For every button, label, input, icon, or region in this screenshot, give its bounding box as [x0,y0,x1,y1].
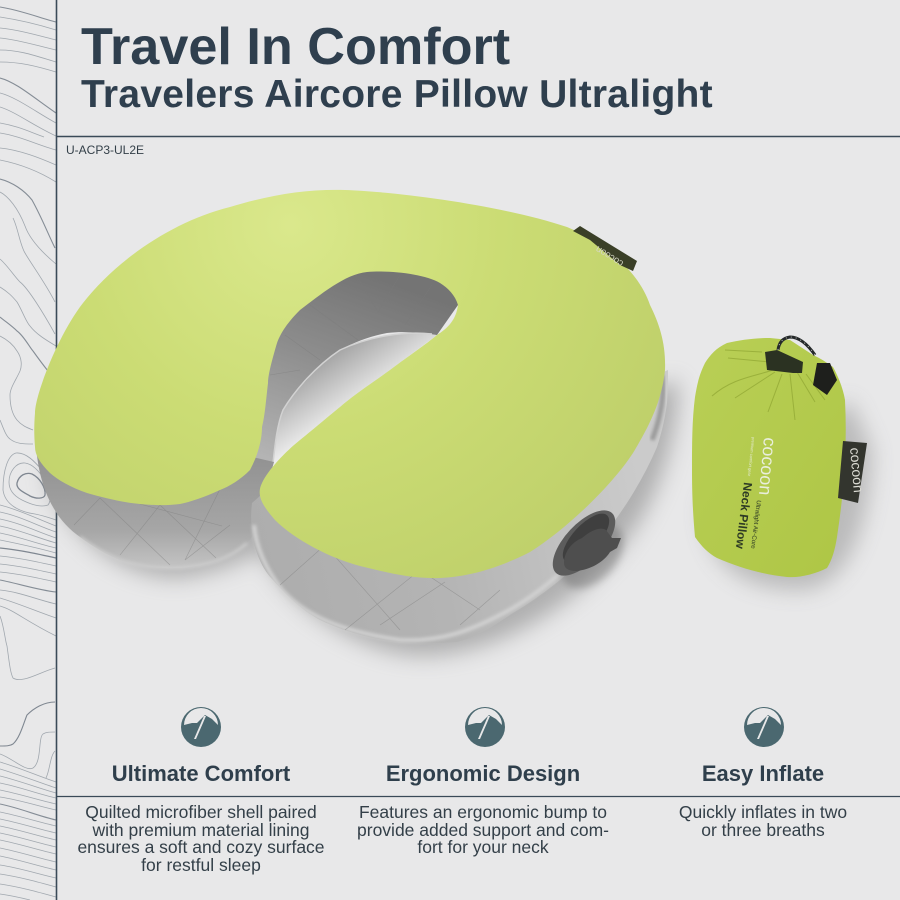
valve base [542,500,626,586]
text: ultimate comfort: for restful sleep [141,854,261,874]
sack gathers [712,350,825,420]
right lobe underside [251,370,668,643]
pillow brand tag [573,226,637,271]
black loop patch [813,363,837,395]
icon: mountain badge 3 [744,707,784,747]
icon: mountain badge 2 [465,707,505,747]
side brand tag: cocoon [847,447,867,493]
valve shadow [549,512,635,600]
text: easy inflate: Quickly inflates in two [679,802,847,822]
text: ergonomic design [357,802,609,857]
text: easy inflate: or three breaths [701,820,825,840]
sack print text: Neck Pillow [733,482,755,550]
right side soft dark area [652,375,663,440]
text: ergonomic design: fort for your neck [417,837,549,857]
sack print text: Ultralight Air-Core [749,500,762,550]
sack print text [733,437,780,550]
subtitle: Travelers Aircore Pillow Ultralight [81,73,713,116]
text: ultimate comfort: Quilted microfiber shell paired [85,802,317,822]
text: ultimate comfort [77,802,325,874]
pillow shadow [45,380,678,656]
heading: easy inflate: Easy Inflate [702,761,824,786]
green top [34,190,665,578]
sack print text: premium comfort gear [747,437,756,477]
quilting lines [74,275,500,630]
pillow brand tag: cocoon [594,243,626,269]
right lobe rim highlight [254,525,600,640]
sack body [692,338,846,577]
side brand tag [838,441,867,503]
inflation valve [542,500,635,600]
text: ultimate comfort: with premium material lining [93,820,309,840]
heading: ultimate comfort: Ultimate Comfort [112,761,290,786]
product code: U-ACP3-UL2E [66,143,144,157]
heading: ergonomic design: Ergonomic Design [386,761,580,786]
text: ergonomic design: Features an ergonomic bump to [359,802,607,822]
left lobe rim highlight [80,537,247,568]
topographic contour pattern [0,7,56,900]
inner neck band [240,250,470,490]
band rim highlight [273,333,432,463]
text: ultimate comfort: ensures a soft and cozy surface [77,837,325,857]
title: Travel In Comfort [81,18,510,76]
text: easy inflate [679,802,847,840]
icon: mountain badge 1 [181,707,221,747]
sack print text: cocoon [755,437,780,496]
valve cap [564,529,621,571]
text: ergonomic design: provide added support and com- [357,820,609,840]
hole shading [270,334,437,480]
sack shadow [705,400,872,590]
drawcord and toggle [765,337,815,373]
left lobe underside [36,440,274,568]
valve ring [555,506,617,570]
neck pillow [34,190,678,656]
stuff sack [692,337,872,590]
